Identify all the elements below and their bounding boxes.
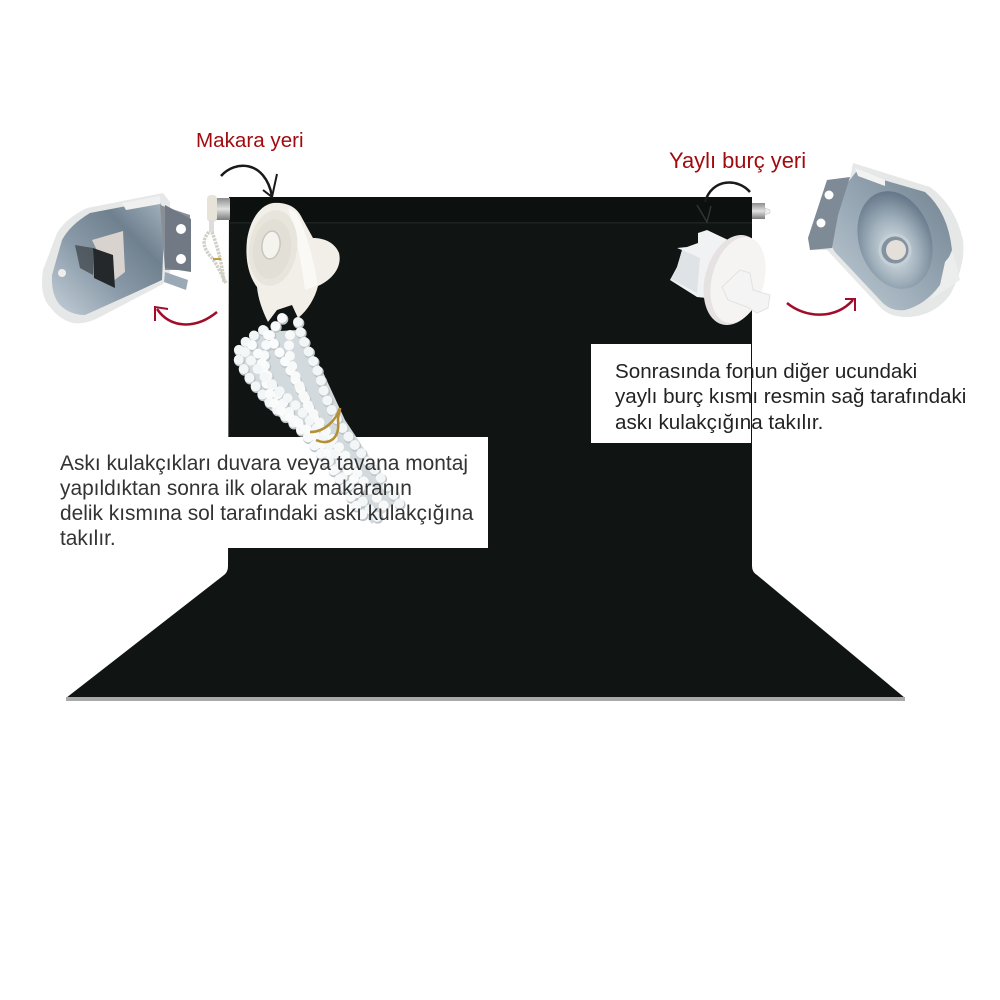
label: Yaylı burç yeri: Yaylı burç yeri <box>669 148 806 173</box>
text: left instruction: Askı kulakçıkları duvara veya tavana montaj <box>60 452 468 475</box>
icon: right wall bracket <box>808 163 963 317</box>
arrow: black arrow to pulley <box>221 166 277 197</box>
black backdrop <box>66 197 905 701</box>
icon: roller axle with cord <box>204 195 230 283</box>
text: right instruction: askı kulakçığına takılır. <box>615 411 823 434</box>
panel: left instruction box <box>228 437 488 548</box>
text: right instruction: Sonrasında fonun diğer ucundaki <box>615 360 917 383</box>
floor rail <box>66 697 905 701</box>
icon: right axle pin <box>752 203 770 219</box>
text: left instruction: takılır. <box>60 527 116 550</box>
arrow: red arrow to right bracket <box>787 299 855 315</box>
arrow: red arrow to left bracket <box>155 307 217 324</box>
icon: rubber band <box>310 408 340 442</box>
panel: right instruction box <box>591 344 751 443</box>
label: Makara yeri: Makara yeri <box>196 129 304 152</box>
text: right instruction <box>615 360 966 434</box>
icon: bead chain <box>237 318 401 524</box>
text: left instruction: delik kısmına sol tarafındaki askı kulakçığına <box>60 502 474 525</box>
icon: chain pulley <box>244 203 340 322</box>
icon: left wall bracket <box>42 193 191 323</box>
icon: spring bushing <box>670 228 775 332</box>
text: left instruction: yapıldıktan sonra ilk olarak makaranın <box>60 477 412 500</box>
arrow: black arrow to bushing <box>697 183 750 222</box>
text: left instruction <box>60 452 474 550</box>
text: right instruction: yaylı burç kısmı resmin sağ tarafındaki <box>615 385 966 408</box>
